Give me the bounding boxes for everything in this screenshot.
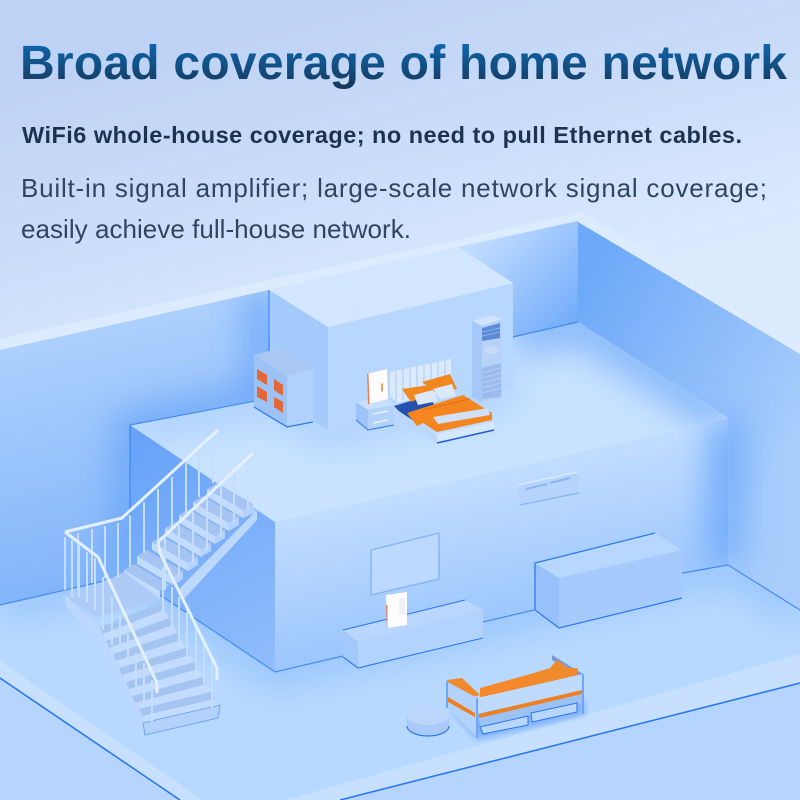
house model (0, 212, 800, 800)
platform left face (130, 425, 275, 672)
wifi router downstairs (386, 592, 407, 628)
balusters (65, 436, 248, 722)
side panel (477, 674, 583, 714)
soft shadow (450, 700, 585, 740)
front slab edges (0, 654, 800, 800)
blanket (433, 408, 490, 424)
body text: easily achieve full-house network. (21, 214, 411, 244)
rear wall section (458, 221, 578, 338)
left back wall (0, 290, 271, 605)
mattress (480, 675, 530, 698)
upper box block (268, 247, 513, 430)
lower flight steps (100, 603, 220, 723)
nightstand (356, 397, 394, 430)
headboard (390, 359, 451, 403)
pillows (447, 660, 578, 698)
title: Broad coverage of home network (20, 37, 787, 90)
stair stringer (65, 595, 145, 735)
air conditioner tower (472, 315, 502, 402)
upper flight steps (124, 483, 256, 600)
subheading: WiFi6 whole-house coverage; no need to pull Ethernet cables. (22, 122, 742, 148)
stair bottom base (143, 705, 220, 735)
platform front face (275, 418, 730, 672)
landing (65, 572, 162, 617)
wall picture frame (371, 533, 439, 595)
pillows (402, 374, 457, 402)
drawers (480, 703, 577, 734)
right inner wall (578, 222, 800, 610)
staircase (65, 430, 257, 735)
round stool (407, 705, 449, 736)
body text (21, 173, 767, 244)
navy gap behind bedding (394, 395, 438, 425)
top rim of the walls (0, 212, 800, 356)
orange stripes (448, 690, 582, 718)
footboard (446, 681, 477, 737)
tv cabinet (343, 600, 483, 668)
body text: Built-in signal amplifier; large-scale network signal coverage; (21, 173, 767, 203)
bed posts (447, 674, 583, 738)
bed downstairs (446, 655, 585, 740)
upper floor (130, 322, 728, 522)
bed upstairs (390, 359, 494, 443)
wall-mounted air conditioner (518, 472, 579, 505)
floor edge lines (0, 290, 800, 672)
wifi router upstairs (367, 369, 388, 404)
lower floor (0, 565, 800, 800)
orange bedding (407, 395, 492, 432)
bed base (394, 408, 437, 443)
upper flight underside (178, 510, 257, 600)
handrails (65, 430, 253, 693)
wardrobe (254, 348, 313, 427)
bed frame back (552, 655, 583, 676)
sideboard (534, 533, 682, 628)
